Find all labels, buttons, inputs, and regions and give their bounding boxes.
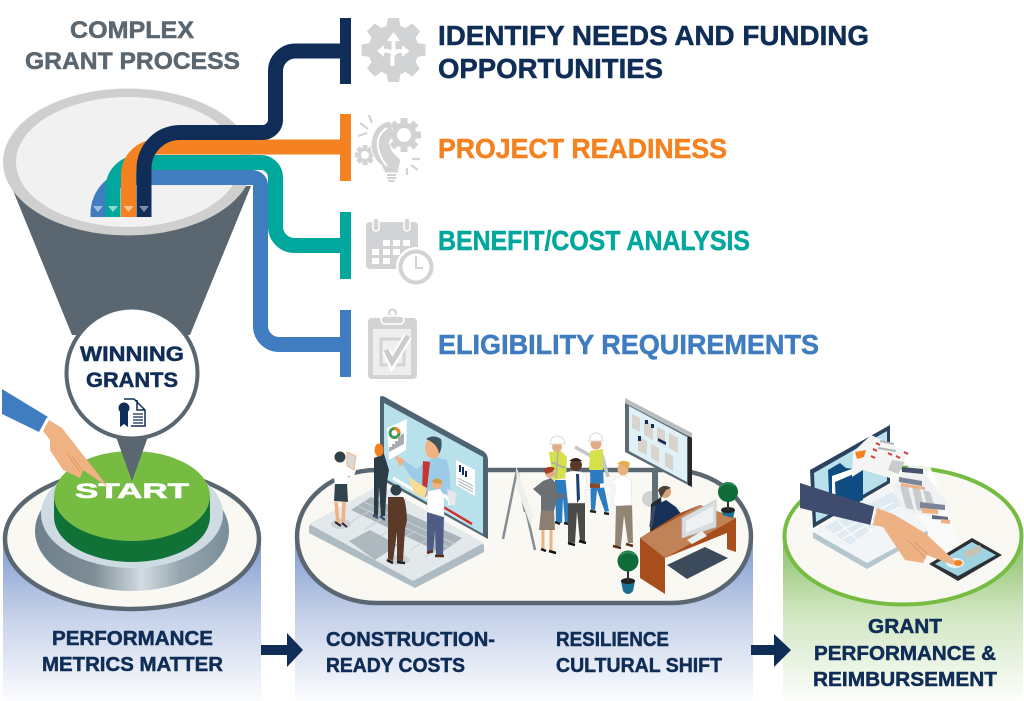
heading: project readiness: PROJECT READINESS xyxy=(438,133,727,164)
title: complex grant process: GRANT PROCESS xyxy=(25,48,240,75)
text: resilience cultural shift: CULTURAL SHIFT xyxy=(556,654,722,677)
title: complex grant process xyxy=(25,17,240,75)
icon: clipboard with check xyxy=(368,310,417,379)
woman in dark suit xyxy=(373,444,389,520)
funnel xyxy=(3,88,253,335)
pipe: identify needs (navy) xyxy=(139,18,351,217)
blond man xyxy=(590,461,633,548)
icon: lightbulb with gears xyxy=(355,115,421,182)
panel: grant performance xyxy=(783,468,1023,701)
heading: identify needs and funding opportunities xyxy=(438,20,869,84)
text: performance metrics matter xyxy=(42,627,223,676)
text: resilience cultural shift xyxy=(556,628,722,677)
panel: construction and resilience xyxy=(295,470,753,701)
text: performance metrics matter: PERFORMANCE xyxy=(52,627,213,650)
documents xyxy=(852,435,958,558)
start button xyxy=(54,451,210,562)
man in white shirt and tie xyxy=(565,458,595,545)
hand and sleeve xyxy=(800,483,955,565)
title: complex grant process: COMPLEX xyxy=(70,17,194,44)
chart papers on screen xyxy=(387,419,475,496)
worker in yellow vest xyxy=(549,436,569,524)
illustration: construction workers and staff xyxy=(533,433,633,553)
text: construction-ready costs: READY COSTS xyxy=(326,654,465,677)
woman with tablet xyxy=(330,452,356,529)
illustration: easel xyxy=(503,466,535,550)
worker with hard hat pointing xyxy=(575,433,609,514)
illustration: laptop with documents and tablet xyxy=(800,425,1002,581)
heading: benefit cost analysis: BENEFIT/COST ANALYSIS xyxy=(438,225,750,256)
start button metal ring xyxy=(35,460,229,591)
heading: identify needs and funding opportunities: OPPORTUNITIES xyxy=(438,53,663,84)
winning grants pin: GRANTS xyxy=(86,368,178,392)
text: grant performance and reimbursement: REIMBURSEMENT xyxy=(813,668,997,691)
pipe: project readiness (orange) xyxy=(124,114,351,217)
illustration: plant behind desk xyxy=(718,482,738,518)
illustration: potted plant xyxy=(618,550,638,594)
presenter on screen xyxy=(394,436,450,498)
text: grant performance and reimbursement: GRANT xyxy=(868,615,942,638)
illustration: laptop with team xyxy=(309,396,488,588)
woman in grey xyxy=(533,467,570,553)
text: performance metrics matter: METRICS MATTER xyxy=(42,653,223,676)
pipe: eligibility requirements (blue) xyxy=(93,178,351,377)
arrow: to construction panel xyxy=(261,633,303,667)
icon: gear with arrows xyxy=(362,18,426,82)
heading: eligibility requirements: ELIGIBILITY REQUIREMENTS xyxy=(438,329,819,360)
winning grants pin: WINNING xyxy=(80,342,184,366)
text: grant performance and reimbursement: PERFORMANCE & xyxy=(814,642,996,665)
icon: hand pressing start xyxy=(2,389,108,487)
text: grant performance and reimbursement xyxy=(813,615,997,691)
panel: start xyxy=(3,451,261,701)
winning grants pin xyxy=(66,308,198,481)
icon: document with ribbon xyxy=(118,399,145,427)
text: construction-ready costs: CONSTRUCTION- xyxy=(326,628,495,651)
arrow: to grant performance panel xyxy=(751,634,791,667)
start button: START xyxy=(75,480,189,503)
man in brown suit xyxy=(386,484,410,565)
man in white shirt xyxy=(427,478,456,556)
text: resilience cultural shift: RESILIENCE xyxy=(556,628,669,651)
heading: identify needs and funding opportunities: IDENTIFY NEEDS AND FUNDING xyxy=(438,20,869,51)
pipe: benefit cost analysis (teal) xyxy=(108,162,351,279)
illustration: receptionist at desk xyxy=(640,486,736,594)
icon: calendar with clock xyxy=(366,218,436,287)
tablet xyxy=(929,538,1002,581)
text: construction-ready costs xyxy=(326,628,495,677)
illustration: wall display xyxy=(625,398,692,507)
